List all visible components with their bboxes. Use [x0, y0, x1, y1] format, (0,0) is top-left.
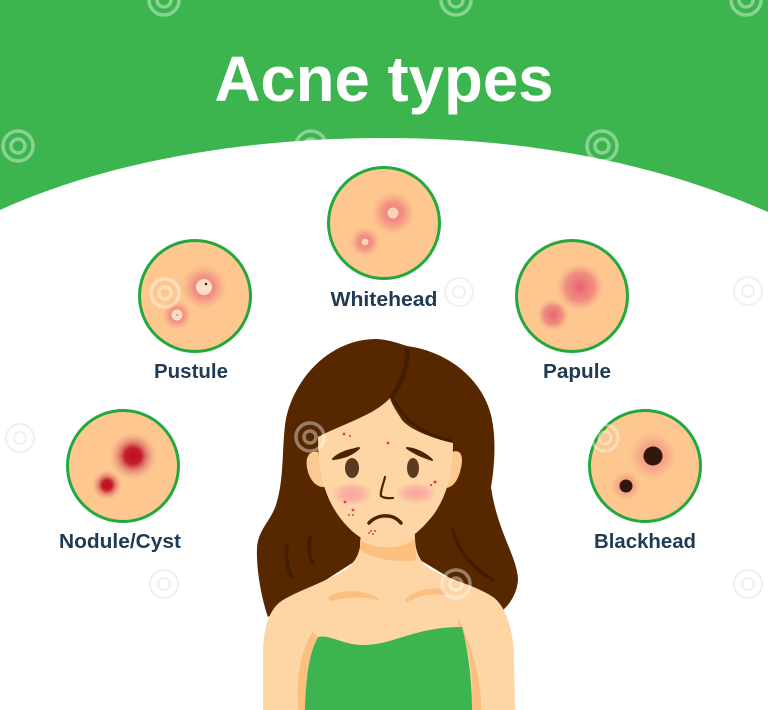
circle: nodule/cyst — [68, 410, 178, 522]
circle: papule — [516, 240, 628, 352]
nose — [381, 477, 393, 498]
neck shadow — [360, 538, 416, 561]
right eyebrow — [407, 448, 432, 460]
watermark spirals on banner — [3, 0, 761, 161]
circle: whitehead — [328, 168, 440, 278]
label: nodule/cyst: Nodule/Cyst — [59, 531, 181, 553]
left eye — [345, 458, 359, 478]
label: blackhead: Blackhead — [594, 531, 696, 553]
ears — [307, 452, 325, 487]
collarbones — [329, 592, 378, 600]
circle: blackhead — [590, 410, 700, 522]
label: papule: Papule — [543, 361, 611, 383]
face — [318, 398, 453, 545]
hair back — [257, 339, 518, 617]
body — [263, 530, 515, 710]
arm shadows — [298, 632, 318, 710]
acne spots — [343, 433, 436, 535]
cheeks — [331, 482, 373, 506]
dress — [305, 627, 472, 710]
mouth — [369, 516, 401, 523]
circle: pustule — [140, 240, 250, 352]
right eye — [407, 458, 419, 478]
watermark spirals on figure — [296, 423, 470, 598]
left eyebrow — [333, 448, 359, 459]
faint watermarks on white — [6, 277, 762, 598]
label: whitehead: Whitehead — [330, 289, 438, 311]
hair front shadow — [392, 350, 407, 396]
label: pustule: Pustule — [154, 361, 228, 383]
illustration: woman with acne — [257, 339, 518, 710]
header banner — [0, 0, 768, 212]
title: Acne types — [214, 43, 554, 115]
